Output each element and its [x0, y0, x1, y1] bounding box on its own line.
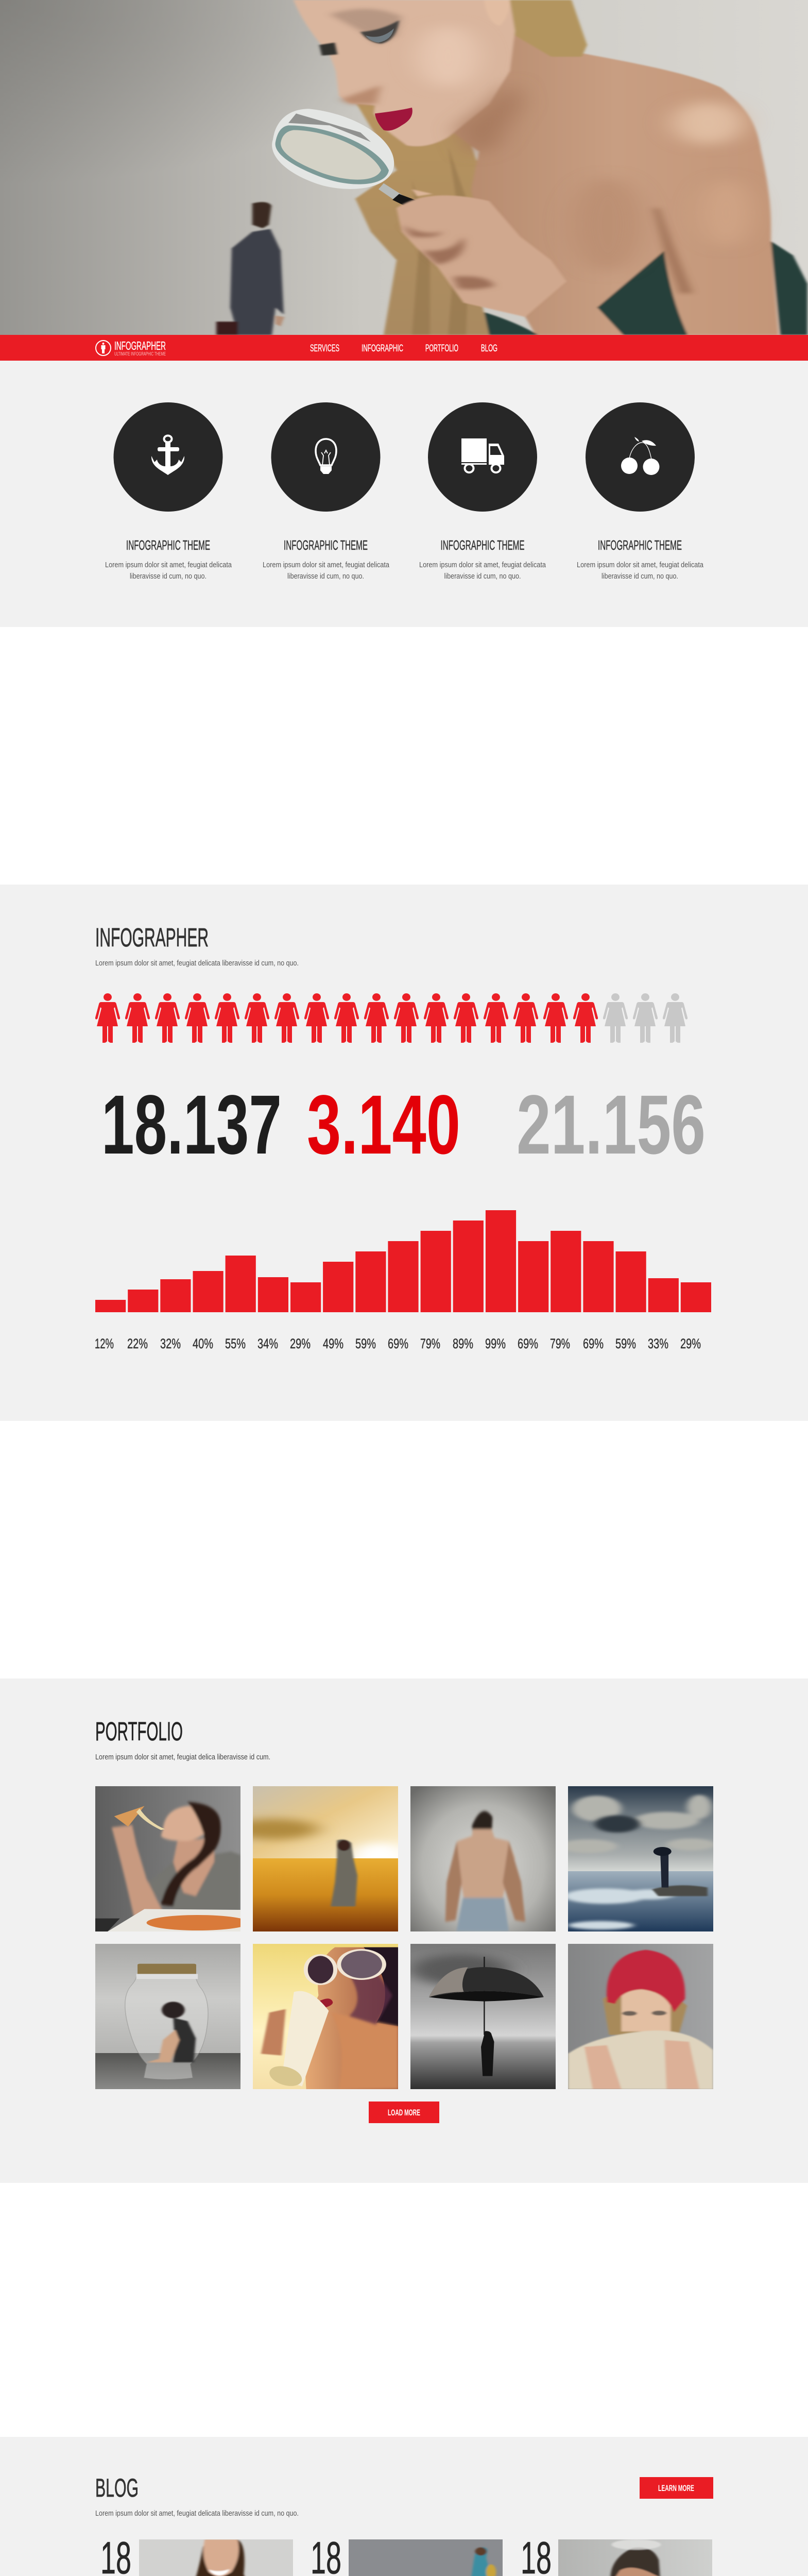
photo: woman in sunglasses drinking: [253, 1944, 398, 2089]
big number black: 18.137: [101, 1077, 282, 1172]
service heading 2: INFOGRAPHIC THEME: [284, 537, 368, 553]
nav logo wordmark: INFOGRAPHER: [114, 339, 166, 352]
photo: woman eating pizza: [95, 1786, 240, 1931]
bar chart percentage labels: 32%: [160, 1336, 181, 1351]
section intro text: Lorem ipsum dolor sit amet, feugiat delicata liberavisse id cum, no quo.: [95, 2509, 299, 2518]
bar chart percentage labels: 69%: [583, 1336, 604, 1351]
panel: blog: [0, 2437, 808, 2576]
section intro text: Lorem ipsum dolor sit amet, feugiat delica liberavisse id cum.: [95, 1753, 270, 1761]
service heading 4: INFOGRAPHIC THEME: [598, 537, 682, 553]
service heading 1: INFOGRAPHIC THEME: [126, 537, 210, 553]
blog post 3: [509, 2532, 712, 2576]
bar chart percentage labels: 29%: [680, 1336, 701, 1351]
learn more button: LEARN MORE: [658, 2483, 694, 2493]
bar chart percentage labels: 69%: [388, 1336, 408, 1351]
service text 3: liberavisse id cum, no quo.: [444, 572, 521, 581]
nav link infographic: INFOGRAPHIC: [362, 343, 403, 354]
photo: tiny man under giant umbrella: [410, 1944, 556, 2089]
bar chart percentage labels: 89%: [453, 1336, 473, 1351]
section heading: INFOGRAPHER: [95, 923, 209, 952]
nav link blog: BLOG: [481, 343, 497, 354]
service text 2: [263, 561, 390, 581]
bar chart percentage labels: 33%: [648, 1336, 668, 1351]
bar chart: [95, 1210, 711, 1312]
pictogram row: 17 of 20 women highlighted: [95, 993, 687, 1043]
panel: services: [0, 361, 808, 627]
section heading: BLOG: [95, 2473, 139, 2502]
nav link portfolio: PORTFOLIO: [425, 343, 458, 354]
service heading 3: INFOGRAPHIC THEME: [441, 537, 524, 553]
nav logo tagline: ULTIMATE INFOGRAPHIC THEME: [114, 351, 166, 357]
bar chart percentage labels: 55%: [225, 1336, 246, 1351]
load more button: LOAD MORE: [388, 2108, 420, 2117]
photo: girl in wheat field: [253, 1786, 398, 1931]
bar chart percentage labels: 59%: [355, 1336, 376, 1351]
learn more button: [640, 2477, 713, 2499]
service text 2: liberavisse id cum, no quo.: [287, 572, 364, 581]
big number red: 3.140: [307, 1077, 460, 1172]
navigation bar: [0, 335, 808, 361]
photo: shirtless man from behind: [410, 1786, 556, 1931]
service circle: cherries: [586, 402, 695, 512]
service text 4: liberavisse id cum, no quo.: [601, 572, 678, 581]
photo: man on rock in stormy sea: [568, 1786, 713, 1931]
bar chart percentage labels: 59%: [615, 1336, 636, 1351]
section heading: PORTFOLIO: [95, 1717, 183, 1746]
service circle: light bulb: [271, 402, 380, 512]
service text 1: [105, 561, 232, 581]
bar chart percentage labels: 22%: [127, 1336, 148, 1351]
service text 3: Lorem ipsum dolor sit amet, feugiat delicata: [419, 561, 546, 569]
photo: woman with tablet: [139, 2539, 293, 2576]
big number grey: 21.156: [517, 1077, 706, 1172]
photo: woman inside glass jar: [95, 1944, 240, 2089]
bar chart percentage labels: 34%: [257, 1336, 278, 1351]
bar chart percentage labels: 99%: [485, 1336, 506, 1351]
load more button: [369, 2102, 439, 2123]
photo: girl climbing books: [349, 2539, 503, 2576]
service text 1: liberavisse id cum, no quo.: [130, 572, 207, 581]
service text 1: Lorem ipsum dolor sit amet, feugiat delicata: [105, 561, 232, 569]
blog post 2: [296, 2532, 503, 2576]
photo: stressed man: [558, 2539, 712, 2576]
service text 3: [419, 561, 546, 581]
bar chart percentage labels: 79%: [420, 1336, 440, 1351]
panel: portfolio: [0, 1679, 808, 2183]
bar chart percentage labels: 79%: [550, 1336, 570, 1351]
service text 2: Lorem ipsum dolor sit amet, feugiat delicata: [263, 561, 390, 569]
hero photo: woman with magnifying glass looking at a small man: [0, 0, 808, 335]
nav link services: SERVICES: [310, 343, 339, 354]
bar chart percentage labels: [95, 1336, 701, 1351]
service text 4: Lorem ipsum dolor sit amet, feugiat delicata: [577, 561, 704, 569]
bar chart percentage labels: 40%: [193, 1336, 213, 1351]
nav logo icon: [96, 341, 111, 355]
service circle: truck: [428, 402, 537, 512]
bar chart percentage labels: 69%: [518, 1336, 538, 1351]
bar chart percentage labels: 12%: [95, 1336, 114, 1351]
panel: infographic statistics: [0, 885, 808, 1421]
photo: woman in red hat and scarf: [568, 1944, 713, 2089]
bar chart percentage labels: 49%: [323, 1336, 343, 1351]
blog post 1: [90, 2532, 293, 2576]
section intro text: Lorem ipsum dolor sit amet, feugiat delicata liberavisse id cum, no quo.: [95, 959, 299, 968]
service text 4: [577, 561, 704, 581]
service circle: anchor: [113, 402, 222, 512]
bar chart percentage labels: 29%: [290, 1336, 311, 1351]
